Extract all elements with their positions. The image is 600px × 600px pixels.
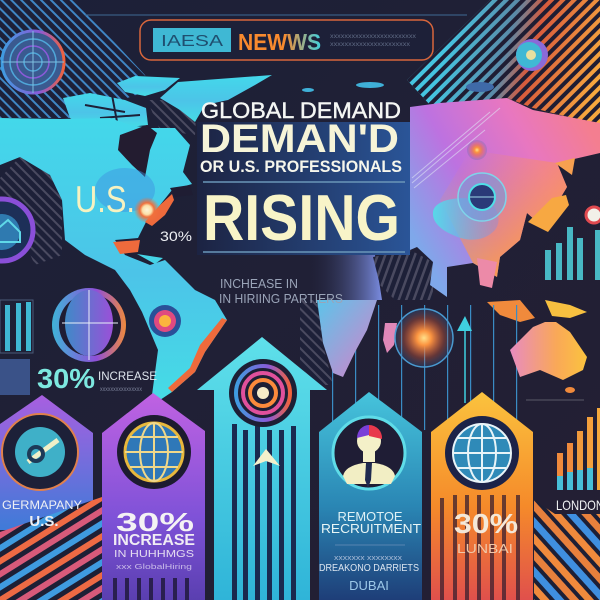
- text: increase in hiring partners: INCHEASE IN: [220, 276, 298, 291]
- icon: left purple circle: [0, 199, 33, 261]
- top-right diagonal stripes: [407, 0, 600, 125]
- label: 30%: 30%: [160, 229, 192, 244]
- label: increase: INCREASE: [113, 532, 195, 549]
- glowing ring: [395, 309, 453, 367]
- icon: small top-right badge: [516, 39, 548, 71]
- stat: 30% increase: xxxxxxxxxxxxxxxx: [100, 387, 142, 393]
- map: the Americas: [0, 75, 272, 402]
- label: breaking barriers: DREAKONO DARRIETS: [319, 562, 419, 574]
- text: increase in hiring partners: IN HIRIING PARTIERS: [219, 291, 343, 306]
- icon: top-left fingerprint globe: [2, 31, 64, 93]
- title panel: [197, 98, 410, 255]
- U.S. glowing location marker: [134, 197, 160, 223]
- header bar: IAESA: [161, 33, 223, 50]
- stat: 30% increase: 30%: [37, 363, 95, 394]
- map: Madagascar: [383, 323, 397, 353]
- map: striped Mediterranean: [373, 250, 433, 300]
- small map blobs: [302, 82, 494, 92]
- map: Australia: [510, 322, 587, 393]
- header bar: xxxxxxxxxxxxxxxxxxxxxx: [330, 42, 410, 48]
- striped dark land region: [0, 157, 62, 265]
- map: striped panel left of Africa: [300, 300, 333, 385]
- title line: global demand: GLOBAL DEMAND: [201, 98, 401, 123]
- label: U.S.: U.S.: [75, 179, 135, 220]
- icon: professional person: [343, 425, 395, 488]
- small caption: xxx GlobalHiring: [116, 564, 192, 571]
- map highlight: right target: [586, 207, 600, 223]
- vertical grid lines: [330, 305, 520, 430]
- label: remote: REMOTOE: [338, 510, 402, 524]
- header bar: xxxxxxxxxxxxxxxxxxxxxxxx: [330, 34, 416, 40]
- map highlight: glowing dot: [467, 140, 487, 160]
- text: increase in hiring partners: [219, 276, 343, 306]
- arrow panel 4: remote recruitment: [319, 392, 422, 600]
- icon: South America target: [149, 305, 181, 337]
- top-left diagonal stripes: [0, 0, 150, 118]
- small caption: xxxxxxx xxxxxxxx: [334, 555, 403, 562]
- arrow panel 2: 30% increase: [102, 393, 205, 600]
- stat: 30%: 30%: [454, 508, 518, 539]
- arrow panel 1: Germany / U.S.: [0, 395, 102, 600]
- label: recruitment: RECRUITMENT: [321, 522, 421, 536]
- bar chart: London: [526, 400, 600, 490]
- bottom-right diagonal stripes: [534, 500, 600, 600]
- map: North Africa fading band: [305, 255, 382, 300]
- label: Lunbai: LUNBAI: [457, 541, 513, 556]
- small upward arrow: [457, 316, 472, 403]
- central up arrow: [197, 337, 327, 600]
- title line: professionals: OR U.S. PROFESSIONALS: [200, 157, 402, 176]
- chart: left vertical bars: [0, 300, 33, 395]
- title line: rising: RISING: [203, 181, 400, 254]
- bar chart: Asia: [545, 227, 600, 280]
- icon: split sphere: [52, 288, 126, 362]
- map: East Asia dark coast: [477, 153, 600, 288]
- title line: demand: DEMAN'D: [200, 117, 399, 161]
- label: U.S.: U.S.: [29, 513, 59, 530]
- map highlight: cyan ring target: [433, 173, 506, 240]
- header bar: [85, 15, 467, 60]
- map: Europe and Asia: [410, 98, 600, 297]
- map: Africa: [317, 300, 377, 377]
- stat: 30%: 30%: [116, 507, 194, 537]
- label: Germany: GERMAPANY: [2, 498, 82, 512]
- label: Dubai: DUBAI: [349, 578, 389, 593]
- header bar: NEWWS: [238, 29, 321, 55]
- stat: 30% increase: [37, 363, 157, 394]
- stat: 30% increase: INCREASE: [98, 371, 157, 383]
- map: Southeast Asia islands: [487, 300, 587, 322]
- arrow panel 5: 30% Lunbai: [431, 392, 533, 600]
- label: in hirings: IN HUHHMGS: [114, 549, 194, 560]
